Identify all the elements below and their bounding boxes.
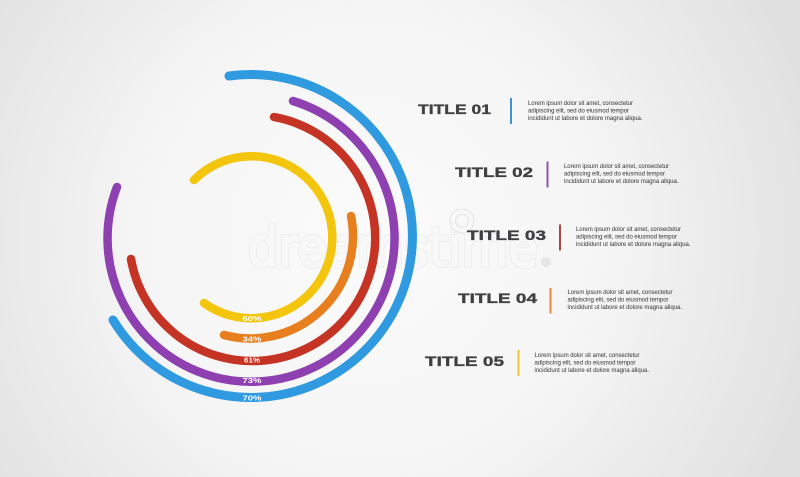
text block: adipiscing elit, sed do eiusmod tempor <box>534 360 636 366</box>
text block: adipiscing elit, sed do eiusmod tempor <box>528 108 630 114</box>
label: 60%: 60% <box>242 314 262 323</box>
radial chart <box>108 75 412 402</box>
item: title 01 <box>418 98 643 124</box>
text block <box>564 163 679 185</box>
heading: TITLE 03 <box>467 227 546 243</box>
heading: TITLE 05 <box>425 353 504 369</box>
divider bar <box>510 98 512 124</box>
text block <box>576 226 691 248</box>
text block: Lorem ipsum dolor sit amet, consectetur <box>564 163 670 170</box>
text block: Lorem ipsum dolor sit amet, consectetur <box>528 100 634 107</box>
divider bar <box>518 350 520 376</box>
divider bar <box>546 162 548 188</box>
heading: TITLE 02 <box>455 164 533 180</box>
item: title 03 <box>467 224 691 250</box>
arc: yellow 60% <box>194 156 332 318</box>
arc: orange 34% <box>224 216 353 338</box>
text block: Lorem ipsum dolor sit amet, consectetur <box>534 352 640 359</box>
item: title 02 <box>455 162 679 188</box>
text block <box>568 289 682 311</box>
text block: incididunt ut labore et dolore magna aliqua. <box>564 178 679 185</box>
text block: incididunt ut labore et dolore magna aliqua. <box>568 304 682 311</box>
text block: incididunt ut labore et dolore magna aliqua. <box>528 115 643 122</box>
text block <box>528 100 643 122</box>
label: 70%: 70% <box>242 394 262 402</box>
text block: adipiscing elit, sed do eiusmod tempor <box>568 296 669 304</box>
arc: blue 70% <box>113 75 412 398</box>
watermark: dreamstime <box>248 216 538 279</box>
text block: incididunt ut labore et dolore magna aliqua. <box>576 241 691 248</box>
item: title 05 <box>425 350 649 376</box>
heading: TITLE 04 <box>458 290 537 306</box>
text block: Lorem ipsum dolor sit amet, consectetur <box>576 226 682 233</box>
watermark: dreamstime <box>248 216 538 279</box>
text block: Lorem ipsum dolor sit amet, consectetur <box>568 289 673 296</box>
arc: purple 73% <box>108 101 395 382</box>
heading: TITLE 01 <box>418 101 491 117</box>
text block: incididunt ut labore et dolore magna aliqua. <box>534 367 649 374</box>
label: 73%: 73% <box>242 376 262 385</box>
item: title 04 <box>458 288 682 314</box>
divider bar <box>559 224 561 250</box>
arc: red 61% <box>131 117 375 361</box>
divider bar <box>550 288 552 314</box>
text block: adipiscing elit, sed do eiusmod tempor <box>564 170 666 178</box>
label: 34%: 34% <box>242 334 262 344</box>
text block <box>534 352 649 374</box>
text block: adipiscing elit, sed do eiusmod tempor <box>576 234 678 240</box>
label: 61%: 61% <box>244 356 261 364</box>
